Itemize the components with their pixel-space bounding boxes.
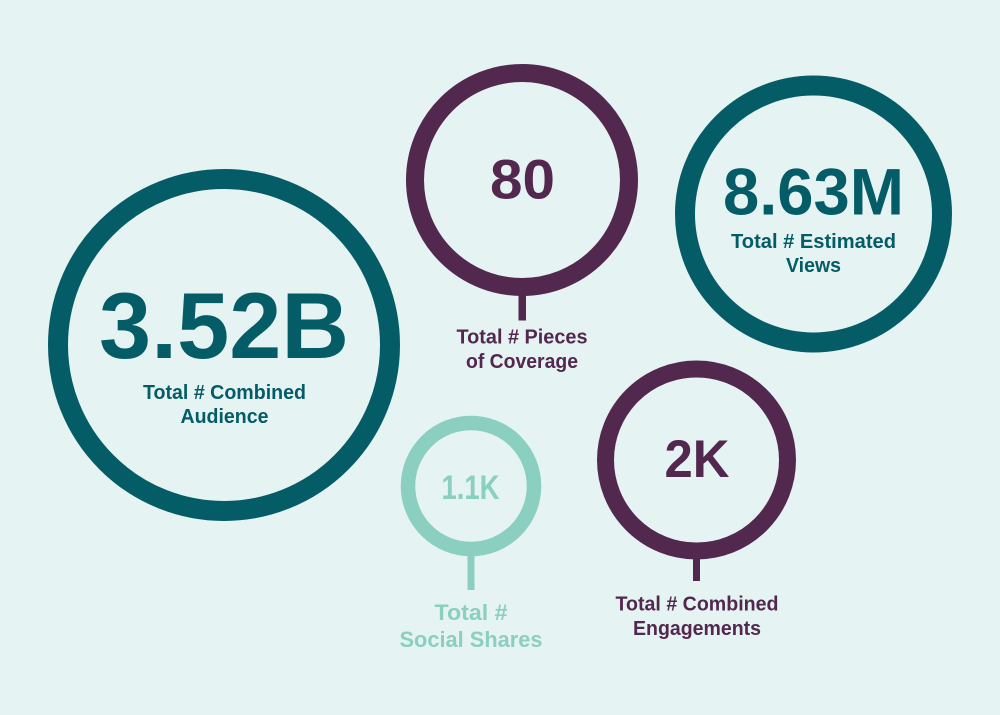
metric: social shares: Social Shares [400, 627, 542, 652]
metric: social shares: 1.1K [442, 469, 500, 507]
metric: combined engagements [606, 369, 788, 640]
metric: estimated views: 8.63M [723, 154, 904, 228]
metric: combined audience: Audience [180, 406, 268, 428]
metric: combined audience: Total # Combined [143, 382, 306, 404]
metric: pieces of coverage: Total # Pieces [456, 326, 588, 348]
metric: combined audience [58, 179, 390, 511]
metric: pieces of coverage: of Coverage [466, 351, 578, 373]
metric: combined engagements: Engagements [633, 618, 761, 640]
metric: social shares: Total # [434, 600, 508, 625]
metric: pieces of coverage [415, 73, 629, 373]
metric: estimated views [685, 86, 942, 342]
metric: pieces of coverage: 80 [490, 148, 555, 210]
metric: estimated views: Views [786, 255, 841, 277]
metric: combined engagements: 2K [664, 430, 730, 489]
metric: estimated views: Total # Estimated [731, 231, 896, 253]
metric: combined engagements: Total # Combined [616, 594, 778, 616]
metric: social shares [400, 423, 542, 652]
metric: combined audience: 3.52B [99, 273, 349, 378]
